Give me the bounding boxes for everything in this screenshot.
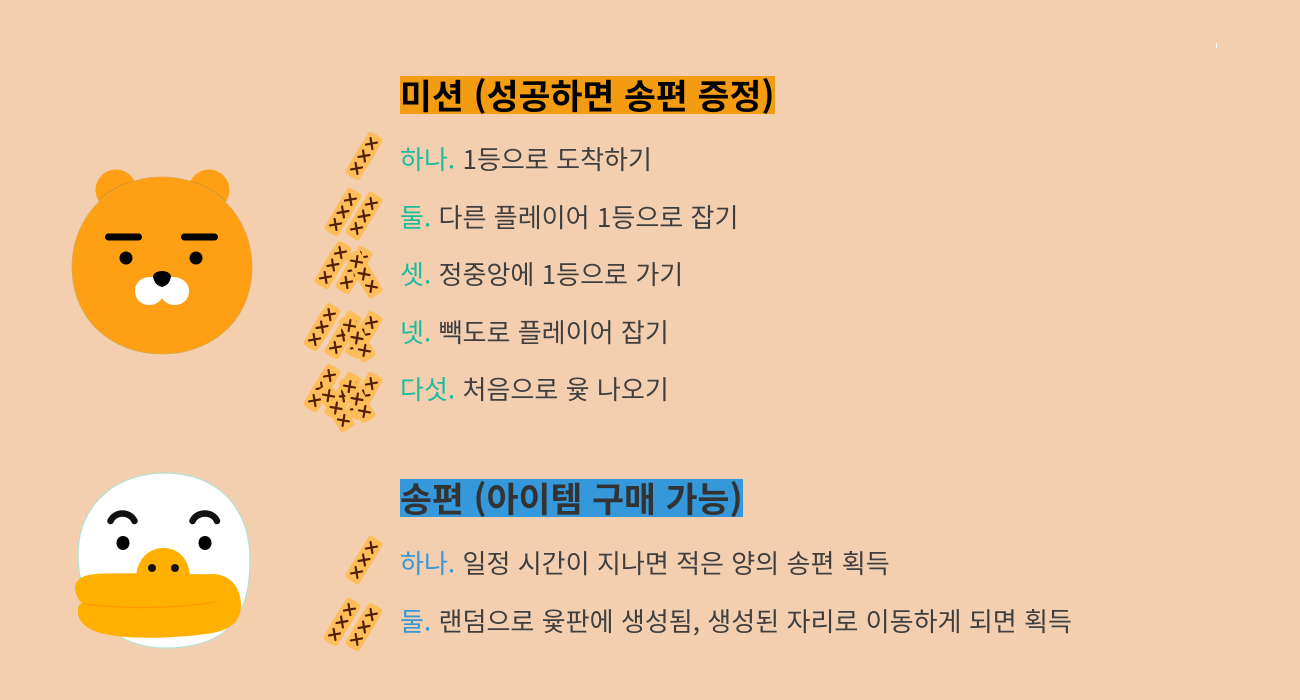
- icon: white duck face: [75, 473, 250, 648]
- mission item 5: 다섯. 처음으로 윷 나오기: [400, 369, 669, 407]
- white speck: [1216, 43, 1217, 48]
- icon: orange bear face: [72, 170, 252, 354]
- mission item 1: 하나. 1등으로 도착하기: [400, 139, 652, 177]
- heading: songpyeon: 송편 (아이템 구매 가능): [400, 472, 743, 522]
- mission item 3: 셋. 정중앙에 1등으로 가기: [400, 254, 683, 292]
- icon: songpyeon 2 tickets: [322, 596, 384, 653]
- icon: mission 2 tickets: [323, 186, 384, 242]
- mission item 2: 둘. 다른 플레이어 1등으로 잡기: [400, 197, 738, 235]
- icon: mission 3 tickets: [313, 239, 384, 300]
- icon: mission 5 tickets: [302, 362, 384, 434]
- mission item 4: 넷. 빽도로 플레이어 잡기: [400, 312, 669, 350]
- icon: mission 1 ticket: [344, 130, 384, 182]
- songpyeon item 1: 하나. 일정 시간이 지나면 적은 양의 송편 획득: [400, 543, 890, 581]
- songpyeon item 2: 둘. 랜덤으로 윷판에 생성됨, 생성된 자리로 이동하게 되면 획득: [400, 601, 1072, 639]
- icon: mission 4 tickets: [302, 301, 384, 364]
- heading: mission: 미션 (성공하면 송편 증정): [400, 69, 774, 119]
- icon: songpyeon 1 ticket: [344, 534, 384, 586]
